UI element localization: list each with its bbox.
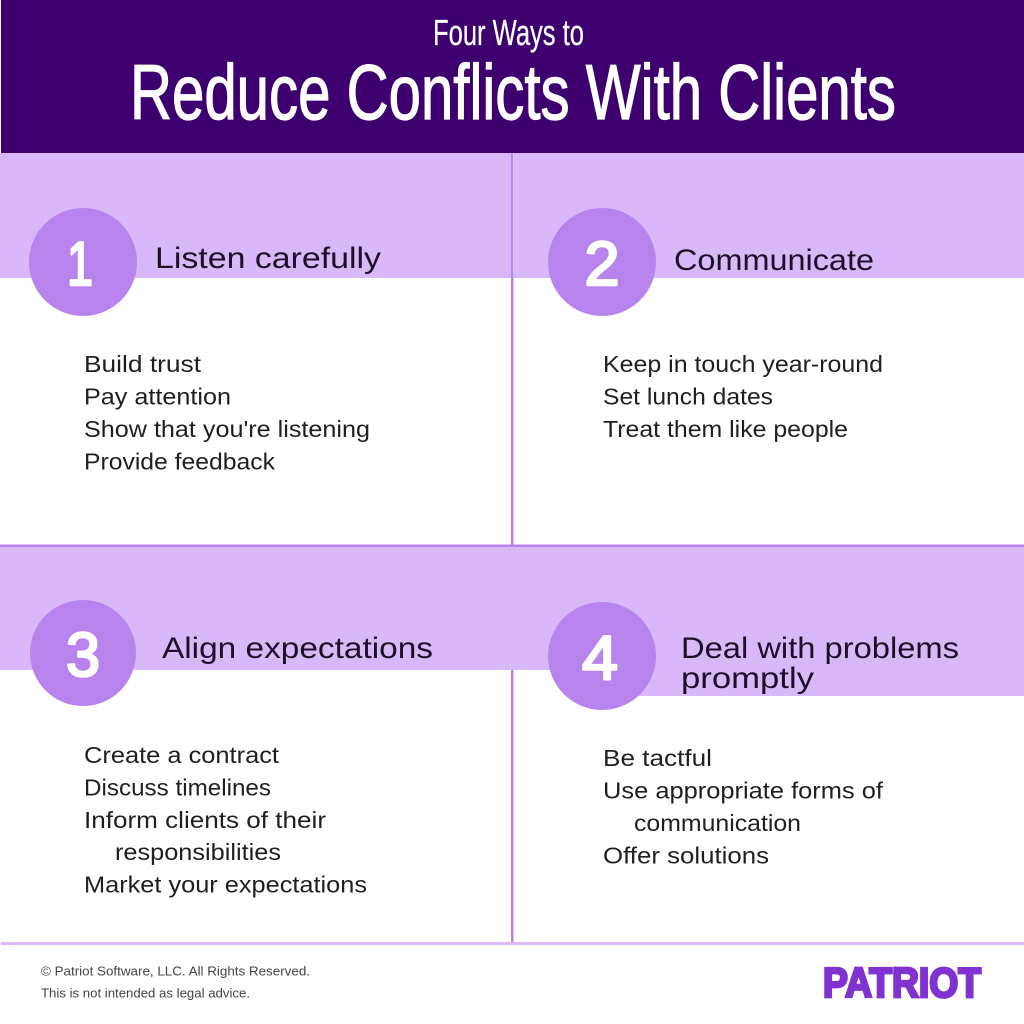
panel: listen carefully: 1 xyxy=(67,230,93,299)
panel: communicate: Treat them like people xyxy=(603,416,848,442)
panel: communicate: Keep in touch year-round xyxy=(603,351,883,377)
footer legal text: This is not intended as legal advice. xyxy=(41,986,250,1000)
panel: deal with problems: promptly xyxy=(681,662,814,695)
panel: listen carefully: Show that you're listening xyxy=(84,416,370,442)
panel: align expectations: 3 xyxy=(66,621,100,690)
panel: listen carefully: Pay attention xyxy=(84,384,231,410)
panel: deal with problems: Offer solutions xyxy=(603,842,769,868)
panel: deal with problems xyxy=(511,546,1024,868)
panel: communicate: Communicate xyxy=(674,244,874,277)
footer legal text: © Patriot Software, LLC. All Rights Reserved. xyxy=(41,964,310,978)
panel: align expectations: Align expectations xyxy=(162,632,433,665)
panel: communicate xyxy=(514,153,1024,442)
panel: align expectations xyxy=(0,546,511,898)
footer legal text xyxy=(41,964,310,1000)
panel: deal with problems: Deal with problems xyxy=(681,632,959,665)
panel: deal with problems: 4 xyxy=(582,624,618,693)
panel: align expectations: Market your expectations xyxy=(84,872,367,898)
panel: align expectations: Discuss timelines xyxy=(84,774,271,800)
panel: listen carefully: Provide feedback xyxy=(84,448,276,474)
panel: align expectations: responsibilities xyxy=(115,839,281,865)
panel: communicate: 2 xyxy=(584,230,620,299)
panel: align expectations: Inform clients of their xyxy=(84,807,326,833)
panel: listen carefully: Listen carefully xyxy=(155,242,381,275)
panel: deal with problems: Be tactful xyxy=(603,745,712,771)
panel: deal with problems: communication xyxy=(634,810,801,836)
panel: deal with problems: Use appropriate forms of xyxy=(603,778,884,804)
title banner xyxy=(1,0,1024,153)
panel: align expectations: Create a contract xyxy=(84,742,280,768)
title banner: Four Ways to xyxy=(433,12,584,53)
panel: listen carefully xyxy=(0,153,511,474)
logo: Patriot: PATRIOT xyxy=(823,959,981,1006)
panel: listen carefully: Build trust xyxy=(84,351,202,377)
panel: communicate: Set lunch dates xyxy=(603,384,773,410)
